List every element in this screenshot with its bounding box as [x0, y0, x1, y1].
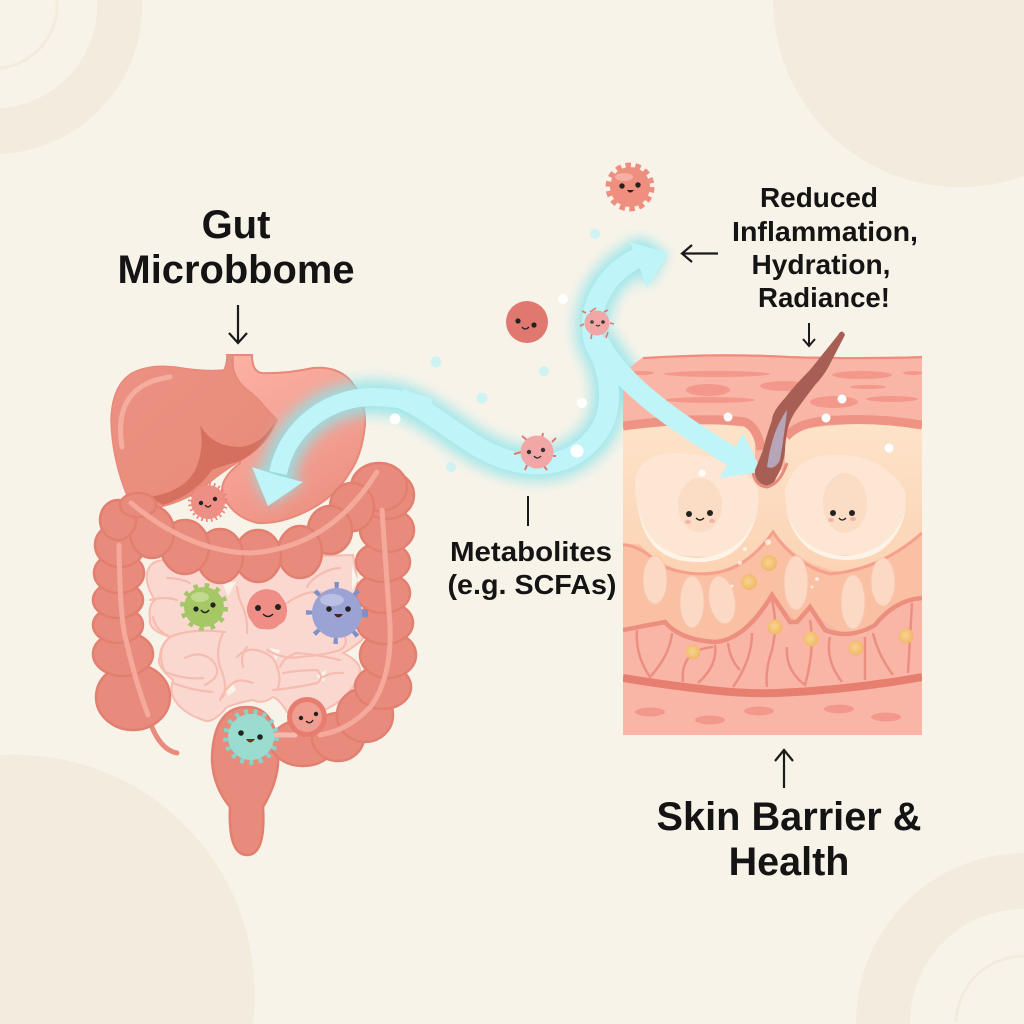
microbe: green [184, 587, 224, 627]
arrow: central wave and up-branch [400, 257, 640, 464]
microbe: small pink on arrow [580, 308, 614, 339]
small intestine [147, 555, 364, 721]
transverse colon [351, 463, 407, 511]
arrow: results to skin [803, 323, 815, 346]
dermis band [623, 420, 922, 450]
heading: Gut Microbiome: Microbbome [118, 248, 354, 292]
microbe: red ball [506, 301, 548, 343]
metabolites connector [527, 496, 529, 526]
arrow: to stomach [278, 397, 430, 473]
glowing arrows [252, 242, 762, 506]
heading: skin barrier and health: Skin Barrier & [656, 795, 922, 839]
arrow: gut label down [229, 305, 247, 343]
descending colon [355, 665, 411, 709]
heading: skin barrier and health: Health [729, 840, 849, 884]
liver [111, 355, 277, 507]
callout: reduced inflammation [732, 182, 918, 313]
microbe: pink on wave [514, 433, 556, 470]
arrow: skin label up [775, 750, 793, 788]
label: metabolites: Metabolites [450, 536, 612, 567]
arrowhead: up-branch [630, 242, 668, 288]
callout: reduced inflammation: Radiance! [758, 282, 890, 313]
callout: reduced inflammation: Hydration, [752, 249, 890, 280]
orange layer [623, 532, 922, 642]
heading: Gut Microbiome [118, 203, 354, 292]
layer boundaries [623, 532, 922, 574]
label: metabolites [448, 536, 616, 600]
heading: skin barrier and health [656, 795, 922, 884]
faces on fat cells [685, 510, 856, 524]
colon highlight stripes [119, 472, 390, 735]
liver shadow lobe [150, 421, 275, 505]
cecum and ascending colon [96, 664, 170, 730]
gold droplets [686, 555, 914, 660]
label: metabolites: (e.g. SCFAs) [448, 569, 616, 600]
capsules [643, 556, 895, 629]
callout: reduced inflammation: Reduced [760, 182, 878, 213]
heading: Gut Microbiome: Gut [202, 203, 270, 247]
appendix [150, 722, 177, 753]
stomach [222, 355, 365, 523]
microbe: teal [228, 714, 274, 760]
cyan particles [430, 229, 600, 472]
microbe: spiky pink near liver [191, 485, 225, 519]
colon [93, 463, 416, 855]
hair follicle [753, 332, 845, 487]
skin base [623, 350, 922, 735]
blood vessels [637, 600, 912, 687]
epidermis lenses [630, 371, 923, 408]
arrow: branch to skin [598, 340, 762, 478]
sigmoid and rectum [212, 707, 278, 855]
arrowhead: stomach [252, 467, 303, 506]
lower capsules [635, 704, 901, 724]
white particles [390, 294, 894, 476]
small bubbles [730, 539, 819, 588]
microbe: sun red top [610, 167, 650, 207]
fat cells [635, 453, 907, 562]
panel: skin cross-section [623, 350, 923, 735]
panel: digestive system [93, 355, 416, 855]
microbe: pink blob [247, 589, 287, 629]
microbe: red round [287, 697, 327, 737]
cream dermis layer [623, 424, 922, 574]
thick vessel [623, 677, 922, 693]
microbe: blue [311, 587, 363, 639]
arrow: results pointing to up-branch [682, 245, 718, 262]
callout: reduced inflammation: Inflammation, [732, 216, 918, 247]
